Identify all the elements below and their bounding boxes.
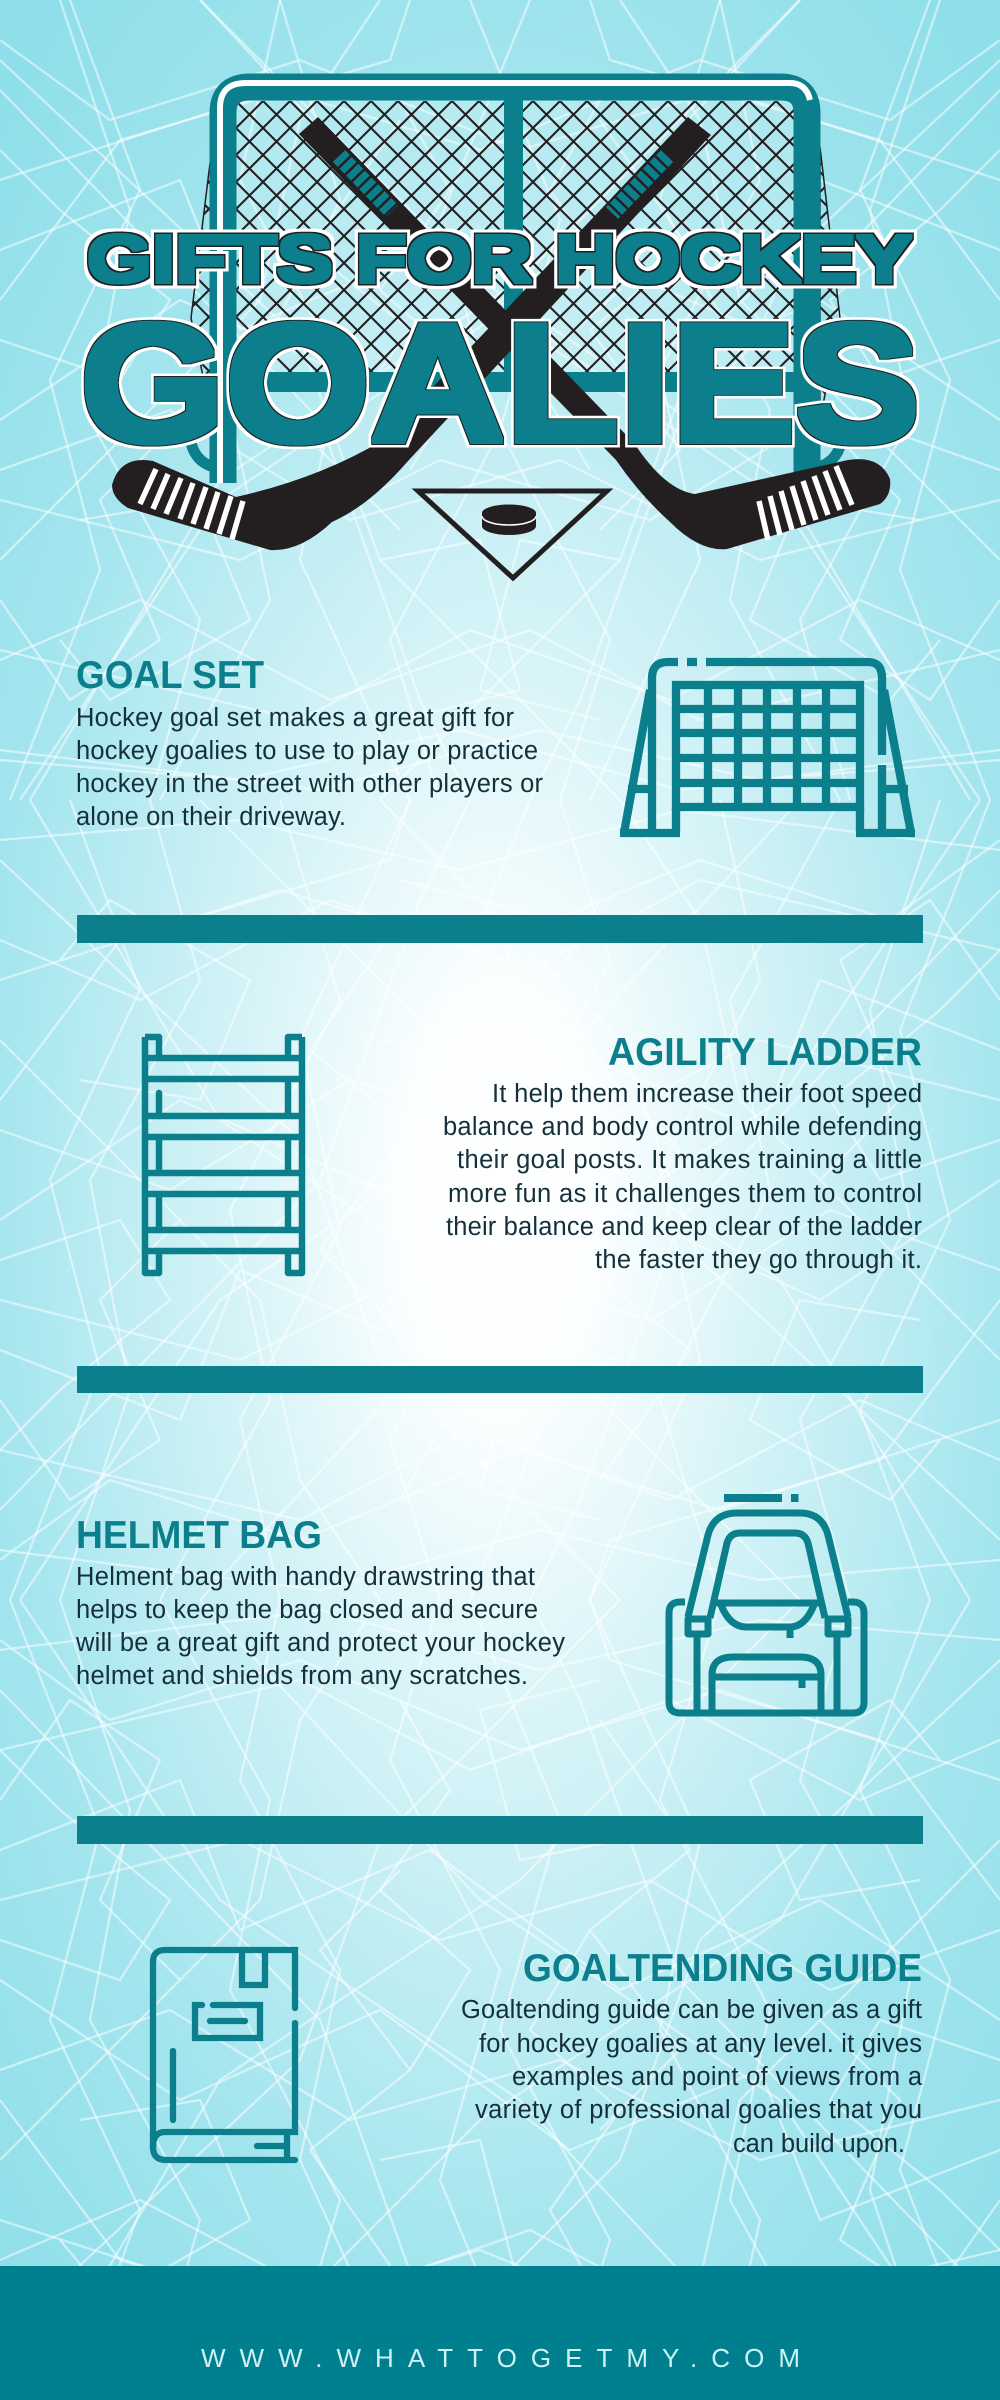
text: helmet bag description: helmet and shields from any scratches. bbox=[76, 1662, 528, 1690]
footer url: WWW.WHATTOGETMY.COM bbox=[201, 2343, 800, 2373]
divider 3 bbox=[77, 1816, 923, 1844]
text: goaltending guide description: variety of professional goalies that you bbox=[475, 2096, 922, 2124]
text: goaltending guide description: examples and point of views from a bbox=[512, 2063, 923, 2091]
text: goal set description: hockey in the street with other players or bbox=[76, 770, 544, 798]
text: agility ladder description bbox=[443, 1080, 922, 1274]
heading: agility ladder: AGILITY LADDER bbox=[608, 1031, 922, 1074]
section: goal set bbox=[76, 654, 915, 837]
footer band bbox=[0, 2266, 1000, 2400]
heading: goaltending guide: GOALTENDING GUIDE bbox=[523, 1947, 922, 1990]
text: goal set description: alone on their driveway. bbox=[76, 803, 346, 831]
section: helmet bag bbox=[75, 1498, 864, 1713]
divider 1 bbox=[77, 915, 923, 943]
text: agility ladder description: balance and body control while defending bbox=[443, 1113, 922, 1141]
text: agility ladder description: It help them increase their foot speed bbox=[492, 1080, 922, 1108]
section: agility ladder bbox=[145, 1031, 922, 1274]
text: helmet bag description bbox=[75, 1563, 565, 1690]
hero illustration: hockey goal, sticks, puck and title bbox=[80, 83, 920, 578]
text: goal set description bbox=[76, 704, 544, 831]
title: GOALIES bbox=[80, 289, 920, 477]
icon: duffel bag bbox=[669, 1498, 864, 1713]
title bbox=[80, 222, 920, 477]
text: goaltending guide description: Goaltending guide can be given as a gift bbox=[461, 1996, 922, 2024]
icon: ladder bbox=[145, 1037, 302, 1273]
text: goaltending guide description bbox=[461, 1996, 923, 2158]
heading: goal set: GOAL SET bbox=[76, 654, 264, 697]
text: goaltending guide description: for hockey goalies at any level. it gives bbox=[479, 2030, 922, 2058]
heading: helmet bag: HELMET BAG bbox=[76, 1514, 322, 1557]
text: goal set description: Hockey goal set makes a great gift for bbox=[76, 704, 514, 732]
text: agility ladder description: the faster they go through it. bbox=[595, 1246, 922, 1274]
text: agility ladder description: their balance and keep clear of the ladder bbox=[446, 1213, 922, 1241]
crossed hockey sticks bbox=[112, 117, 890, 550]
text: agility ladder description: more fun as it challenges them to control bbox=[448, 1180, 922, 1208]
hockey goal bbox=[190, 83, 842, 483]
icon: goal bbox=[620, 662, 915, 837]
title: GIFTS FOR HOCKEY bbox=[87, 222, 912, 297]
section: goaltending guide bbox=[153, 1947, 923, 2160]
text: goaltending guide description: can build upon. bbox=[733, 2130, 905, 2158]
text: goal set description: hockey goalies to use to play or practice bbox=[76, 737, 538, 765]
divider 2 bbox=[77, 1366, 923, 1393]
faceoff triangle bbox=[418, 491, 607, 578]
text: helmet bag description: will be a great gift and protect your hockey bbox=[75, 1629, 565, 1657]
text: agility ladder description: their goal posts. It makes training a little bbox=[457, 1146, 922, 1174]
text: helmet bag description: helps to keep the bag closed and secure bbox=[76, 1596, 538, 1624]
text: helmet bag description: Helment bag with handy drawstring that bbox=[76, 1563, 535, 1591]
hockey puck bbox=[482, 504, 536, 535]
icon: book bbox=[153, 1950, 295, 2160]
